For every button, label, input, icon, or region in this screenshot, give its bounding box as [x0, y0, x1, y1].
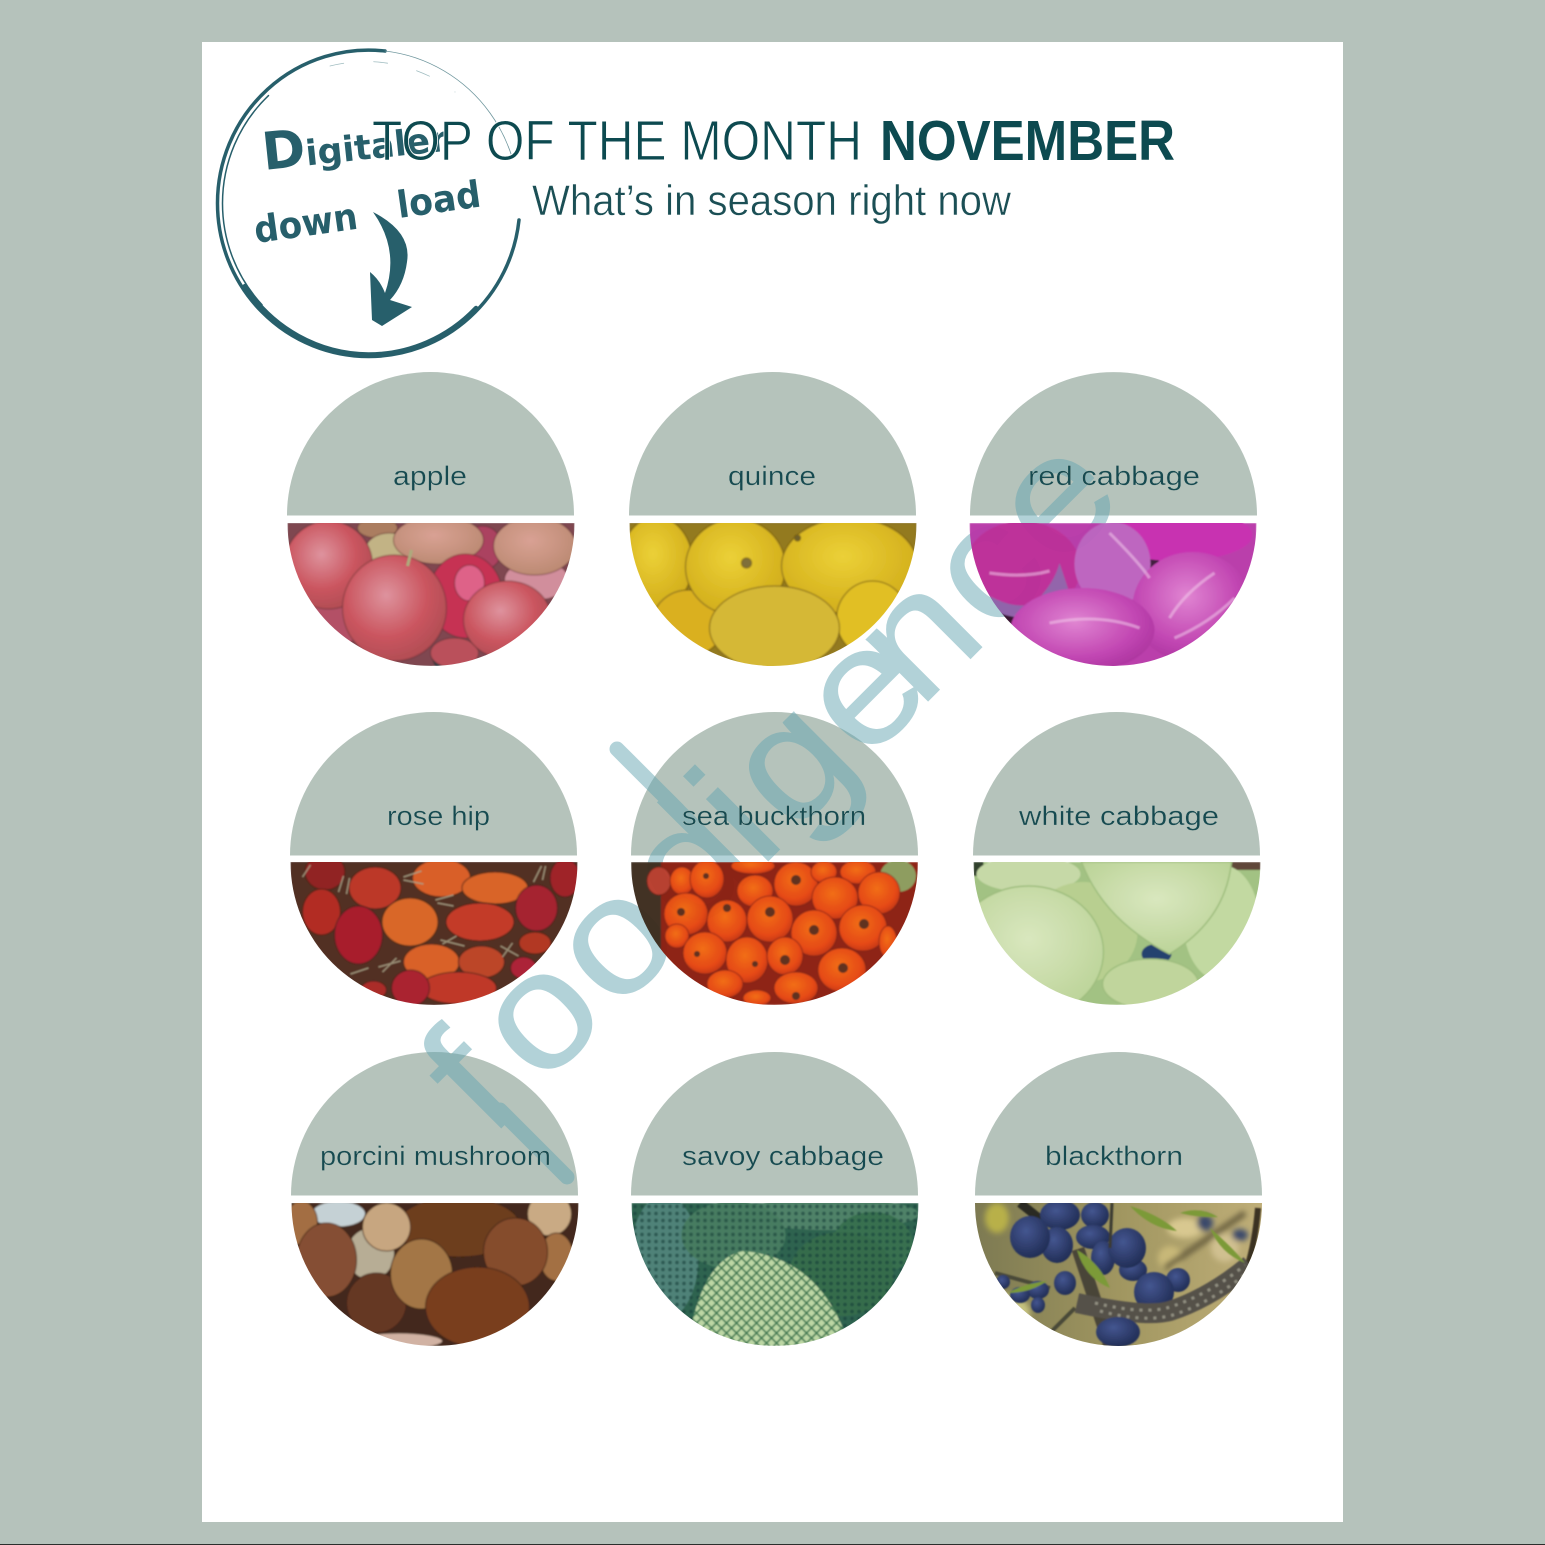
label: quince: quince	[728, 461, 816, 491]
photo: porcini mushrooms	[292, 1203, 578, 1346]
bottom edge line	[0, 1544, 1545, 1545]
title month: NOVEMBER	[880, 109, 1175, 173]
label: porcini mushroom: porcini mushroom	[320, 1141, 551, 1171]
watermark: foodigence: foodigence	[385, 396, 1153, 1164]
photo: blackthorn sloes	[970, 1200, 1262, 1347]
label: white cabbage: white cabbage	[1018, 801, 1219, 831]
panel: rose hip	[290, 806, 578, 1005]
panel: sea buckthorn	[631, 805, 918, 1005]
panel: red cabbage	[970, 465, 1256, 666]
label: sea buckthorn: sea buckthorn	[682, 801, 866, 831]
subtitle: What’s in season right now	[532, 177, 1012, 225]
label: rose hip: rose hip	[387, 801, 490, 831]
panel: quince	[630, 466, 916, 666]
panel: blackthorn	[975, 1146, 1262, 1346]
white sheet panel	[202, 42, 1343, 1522]
panel: porcini mushroom	[292, 1146, 578, 1346]
photo: sea buckthorn berries	[631, 858, 918, 1006]
title: TOP OF THE MONTH	[372, 109, 862, 173]
stamp text: Digitaler: Digitaler	[259, 104, 450, 183]
label backgrounds: sage semicircles	[287, 372, 1262, 1196]
photo: apples	[284, 516, 576, 670]
stamp text: down: down	[251, 195, 360, 252]
label: savoy cabbage: savoy cabbage	[682, 1141, 884, 1171]
icon: curved down arrow	[370, 212, 412, 326]
panel: white cabbage	[974, 806, 1260, 1005]
stamp: digital download	[217, 50, 519, 357]
label: apple: apple	[393, 461, 467, 491]
label: blackthorn: blackthorn	[1045, 1141, 1183, 1171]
photo: quinces	[620, 517, 918, 670]
photo: red cabbages	[970, 523, 1256, 666]
stamp text: load: load	[394, 173, 483, 227]
stamp brush circle	[217, 50, 519, 357]
label: red cabbage: red cabbage	[1028, 461, 1200, 491]
photo: rose hips	[290, 854, 580, 1006]
panel: savoy cabbage	[632, 1146, 918, 1346]
panel: apple	[288, 466, 574, 666]
photo: white cabbages	[974, 862, 1260, 1005]
photo: savoy cabbage	[630, 1195, 918, 1346]
